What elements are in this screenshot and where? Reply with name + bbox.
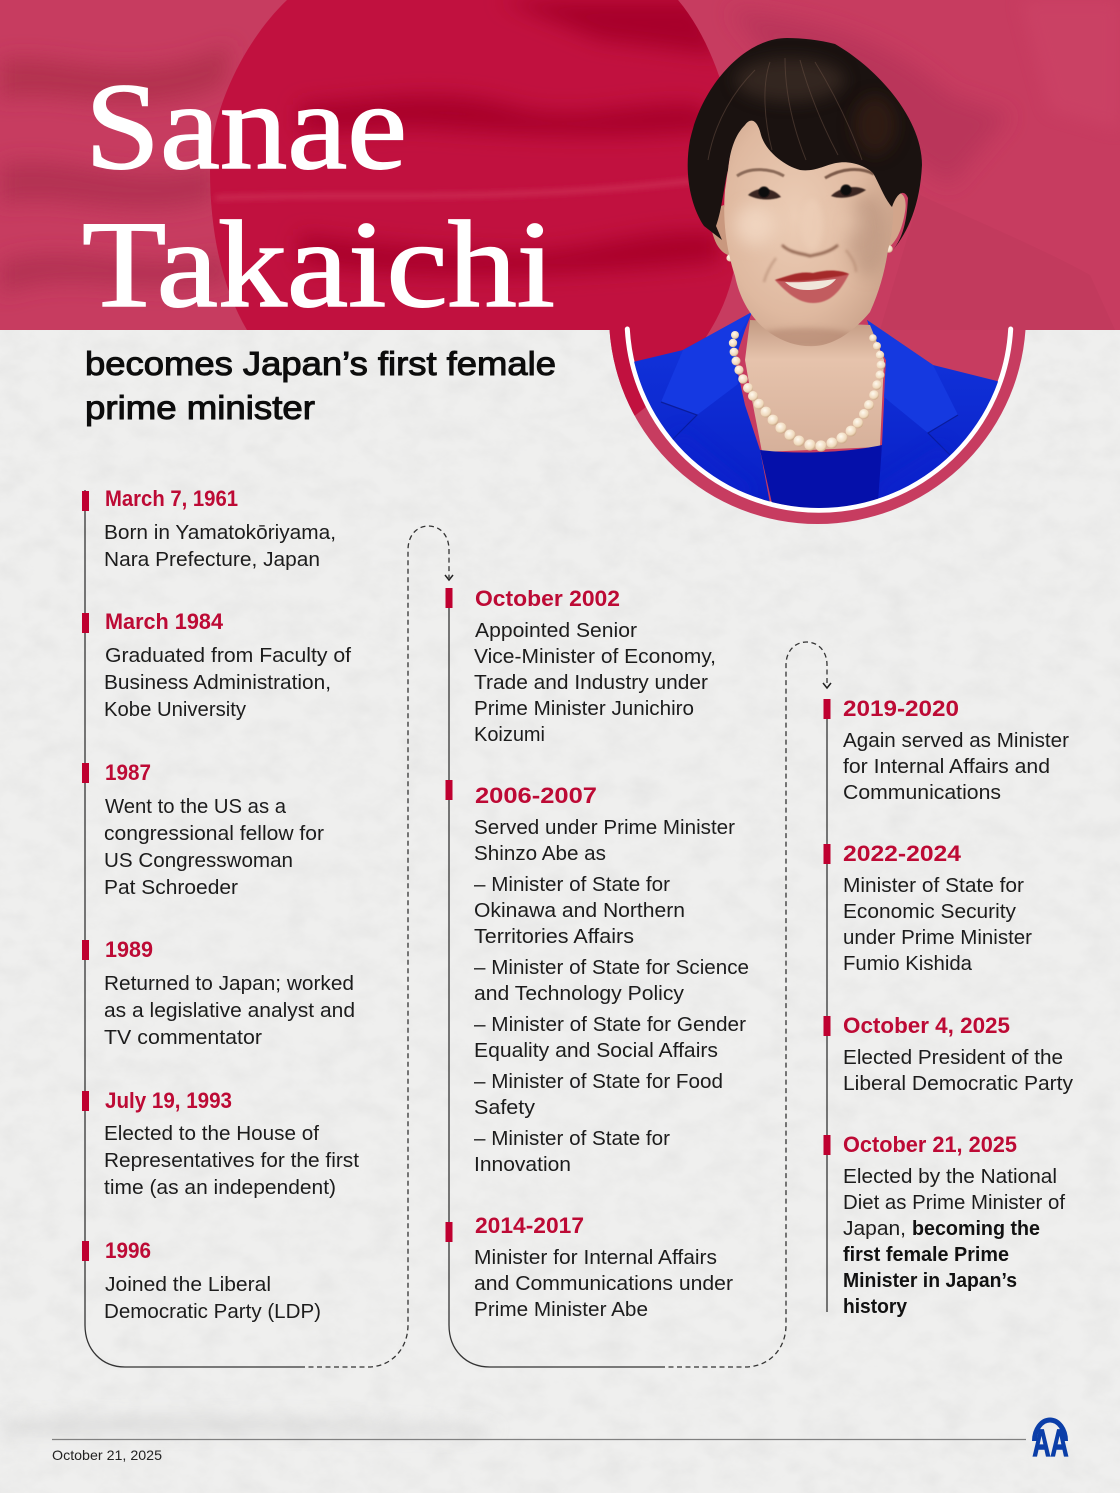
column 1 timeline: [82, 486, 359, 1323]
entry: 2014-2017: [446, 1213, 733, 1321]
neck and chest: [745, 320, 884, 452]
face: [724, 110, 893, 348]
entry: March 1984: Kobe University: [104, 698, 247, 721]
entry: 2006-2007: Okinawa and Northern: [474, 899, 685, 922]
timeline connector lines: [85, 490, 831, 1367]
subtitle: prime minister: [85, 389, 315, 426]
entry: October 4, 2025: Liberal Democratic Party: [843, 1072, 1074, 1095]
entry: October 21, 2025: Japan,: [843, 1217, 906, 1240]
entry: 2006-2007: – Minister of State for Science: [474, 956, 749, 979]
red sun disc: [210, 0, 734, 416]
entry: 2006-2007: 2006-2007: [475, 783, 597, 808]
entry: July 19, 1993: time (as an independent): [104, 1176, 336, 1199]
dress: [760, 445, 882, 508]
entry: 1989: 1989: [105, 937, 153, 962]
entry: 1987: [82, 760, 324, 899]
column 2 timeline: [446, 586, 749, 1321]
entry: 2022-2024: Fumio Kishida: [843, 952, 973, 975]
entry: 1989: [82, 937, 355, 1049]
subtitle: becomes Japan’s first female: [85, 345, 556, 382]
entry: 2006-2007: Innovation: [474, 1153, 571, 1176]
entry: 1989: Returned to Japan; worked: [104, 972, 354, 995]
entry: October 21, 2025: Diet as Prime Minister of: [843, 1191, 1065, 1214]
entry: 1996: [82, 1238, 321, 1323]
entry: July 19, 1993: Elected to the House of: [104, 1122, 319, 1145]
subtitle: [85, 345, 556, 426]
entry: 2006-2007: Shinzo Abe as: [474, 842, 606, 865]
entry: 1996: Joined the Liberal: [105, 1273, 271, 1296]
title: Sanae: [85, 58, 407, 195]
Japanese flag header background: [0, 0, 1120, 540]
pearl necklace: [729, 331, 885, 452]
entry: 2006-2007: [446, 780, 749, 1176]
entry: October 21, 2025: Minister in Japan’s: [843, 1269, 1017, 1292]
entry: 1987: US Congresswoman: [104, 849, 293, 872]
entry: 2019-2020: for Internal Affairs and: [843, 755, 1050, 778]
entry: 2022-2024: 2022-2024: [843, 841, 962, 866]
entry: 2006-2007: Territories Affairs: [474, 925, 634, 948]
entry: October 2002: [446, 586, 716, 746]
column 2 connector: [449, 588, 831, 1367]
entry: March 1984: March 1984: [105, 609, 224, 634]
entry: 1989: TV commentator: [104, 1026, 262, 1049]
column 3 timeline: [824, 696, 1074, 1318]
entry: October 21, 2025: first female Prime: [843, 1243, 1009, 1266]
entry: 2006-2007: – Minister of State for Gender: [474, 1013, 746, 1036]
entry: 2014-2017: Minister for Internal Affairs: [474, 1246, 717, 1269]
entry: 2006-2007: Served under Prime Minister: [474, 816, 735, 839]
entry: 1987: 1987: [105, 760, 151, 785]
title: [82, 58, 555, 333]
entry: March 7, 1961: [82, 486, 336, 571]
entry: 2006-2007: and Technology Policy: [474, 982, 685, 1005]
ears and earrings: [711, 193, 906, 262]
entry: 2019-2020: Again served as Minister: [843, 729, 1069, 752]
entry: 2019-2020: 2019-2020: [843, 696, 959, 721]
entry: 2022-2024: under Prime Minister: [843, 926, 1032, 949]
footer: October 21, 2025: [52, 1447, 162, 1463]
footer: [52, 1420, 1068, 1465]
entry: March 7, 1961: Nara Prefecture, Japan: [104, 548, 320, 571]
entry: 1987: Went to the US as a: [105, 795, 287, 818]
entry: 2006-2007: Safety: [474, 1096, 536, 1119]
logo: Anadolu Agency: [1032, 1420, 1068, 1465]
hair: [688, 38, 922, 250]
portrait frame ring: [627, 329, 1011, 510]
entry: 2006-2007: – Minister of State for: [474, 1127, 670, 1150]
entry: October 21, 2025: history: [843, 1295, 908, 1318]
entry: October 2002: Prime Minister Junichiro: [474, 697, 694, 720]
entry: 2019-2020: Communications: [843, 781, 1001, 804]
entry: July 19, 1993: Representatives for the first: [104, 1149, 359, 1172]
entry: 2019-2020: [824, 696, 1069, 804]
entry: 1987: congressional fellow for: [104, 822, 324, 845]
portrait of Sanae Takaichi: [634, 38, 998, 508]
entry: March 1984: [82, 609, 351, 721]
entry: 2006-2007: Equality and Social Affairs: [474, 1039, 718, 1062]
entry: 1996: 1996: [105, 1238, 151, 1263]
title: Takaichi: [82, 196, 555, 333]
entry: March 7, 1961: Born in Yamatokōriyama,: [104, 521, 336, 544]
entry: 2022-2024: [824, 841, 1032, 975]
entry: March 1984: Graduated from Faculty of: [105, 644, 351, 667]
entry: July 19, 1993: July 19, 1993: [105, 1088, 232, 1113]
entry: October 21, 2025: becoming the: [912, 1217, 1040, 1240]
entry: 2006-2007: – Minister of State for: [474, 873, 670, 896]
entry: October 2002: Trade and Industry under: [474, 671, 708, 694]
entry: October 4, 2025: [824, 1013, 1074, 1095]
entry: October 21, 2025: [824, 1132, 1065, 1318]
entry: July 19, 1993: [82, 1088, 359, 1199]
entry: October 4, 2025: Elected President of the: [843, 1046, 1063, 1069]
entry: October 4, 2025: October 4, 2025: [843, 1013, 1010, 1038]
entry: 2014-2017: 2014-2017: [475, 1213, 584, 1238]
column 3 line: [826, 700, 828, 1312]
entry: March 7, 1961: March 7, 1961: [105, 486, 238, 511]
mouth: [775, 272, 849, 303]
entry: 1987: Pat Schroeder: [104, 876, 238, 899]
entry: October 2002: Koizumi: [474, 723, 545, 746]
entry: 1989: as a legislative analyst and: [104, 999, 355, 1022]
entry: October 2002: Appointed Senior: [475, 619, 637, 642]
column 1 connector: [85, 490, 453, 1367]
logo: Anadolu Agency: AA: [1032, 1423, 1068, 1465]
entry: October 2002: October 2002: [475, 586, 620, 611]
entry: 2006-2007: – Minister of State for Food: [474, 1070, 723, 1093]
entry: October 21, 2025: October 21, 2025: [843, 1132, 1017, 1157]
entry: 2014-2017: and Communications under: [474, 1272, 733, 1295]
entry: 2022-2024: Economic Security: [843, 900, 1017, 923]
entry: 2022-2024: Minister of State for: [843, 874, 1024, 897]
jacket: [634, 312, 998, 502]
entry: 2014-2017: Prime Minister Abe: [474, 1298, 648, 1321]
entry: October 2002: Vice-Minister of Economy,: [474, 645, 716, 668]
entry: March 1984: Business Administration,: [104, 671, 331, 694]
entry: 1996: Democratic Party (LDP): [104, 1300, 321, 1323]
entry: October 21, 2025: Elected by the National: [843, 1165, 1057, 1188]
